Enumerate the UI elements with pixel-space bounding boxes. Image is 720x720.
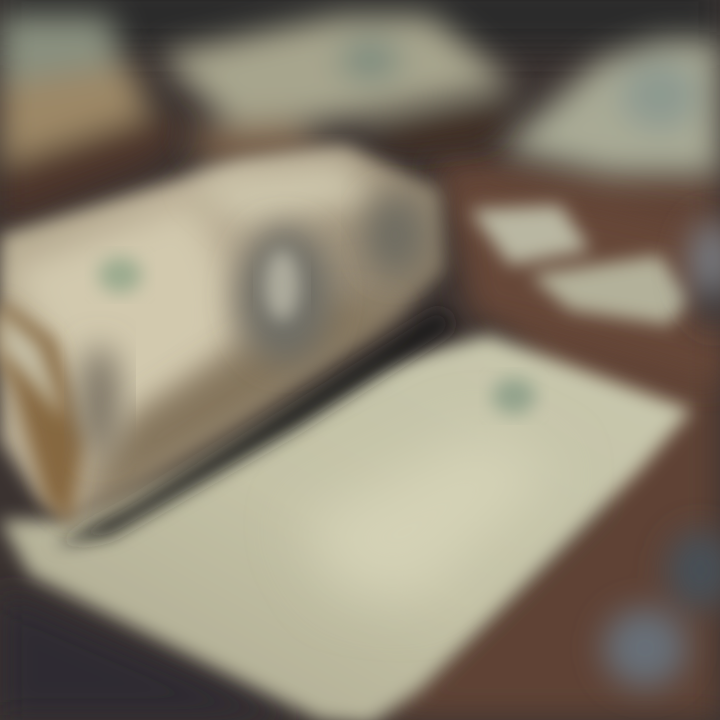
left dark band [80, 345, 120, 455]
coins on right [603, 220, 720, 688]
shadow under roll [55, 310, 455, 545]
wood strip behind stacked notes [450, 170, 720, 385]
small stacked notes on right [470, 205, 690, 325]
top right note [500, 40, 720, 175]
roll edge [0, 300, 85, 525]
roll seal [98, 257, 142, 293]
rolled banknotes [0, 145, 445, 525]
right end shading [365, 195, 425, 275]
top centre note [160, 15, 515, 165]
note seal [492, 378, 536, 414]
large flat banknote [0, 335, 692, 720]
top left roll of notes [0, 15, 190, 225]
vignette portrait [239, 227, 331, 363]
